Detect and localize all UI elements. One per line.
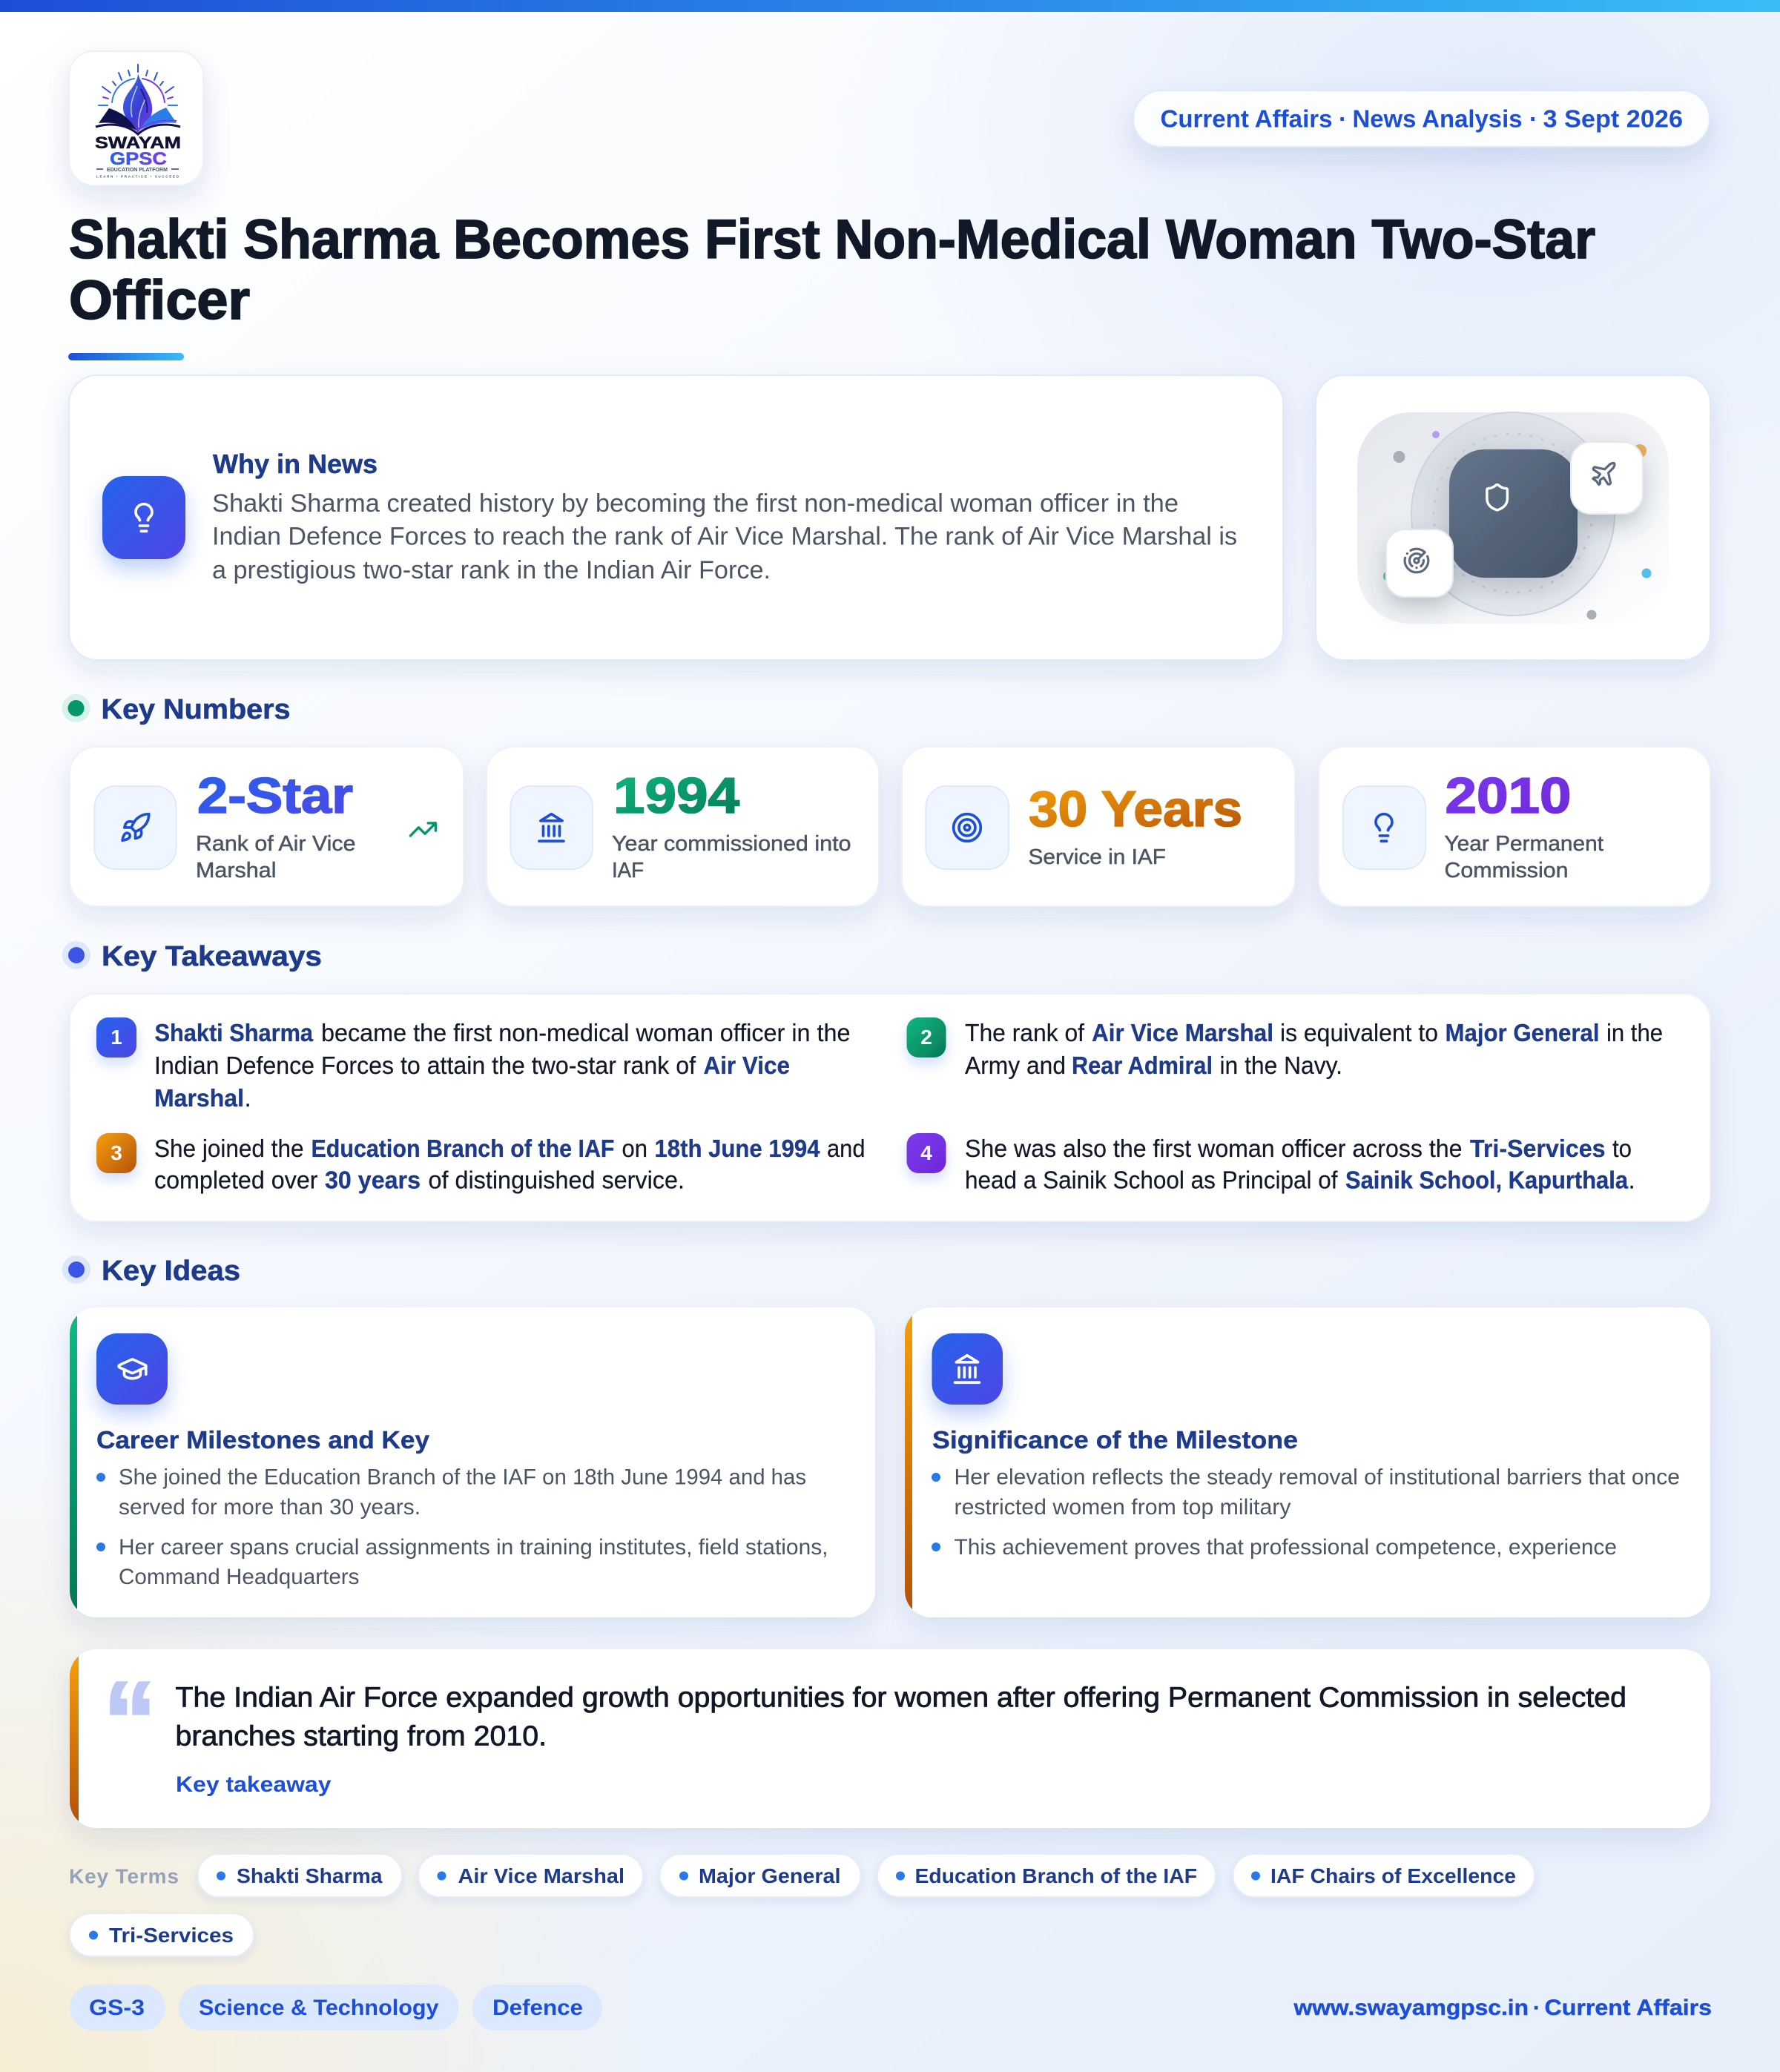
- bullet list: served for more than 30 years.: [119, 1495, 421, 1520]
- title: [69, 208, 1595, 331]
- stat card: 2010: [1319, 747, 1710, 906]
- tag: Defence: Defence: [492, 1996, 583, 2020]
- logo: Swayam GPSC: GPSC: [110, 149, 167, 169]
- logo: Swayam GPSC: [69, 51, 203, 185]
- bullet list: She joined the Education Branch of the IAF on 18th June 1994 and has: [119, 1465, 806, 1489]
- takeaway 3: 3: [111, 1141, 122, 1164]
- takeaway 4: [906, 1133, 1635, 1194]
- takeaway 1: Air Vice: [703, 1052, 790, 1079]
- logo: Swayam GPSC: SWAYAM: [95, 133, 181, 152]
- text: why in news body: Indian Defence Forces to reach the rank of Air Vice Marshal. The rank of Air Vice Marshal is: [212, 522, 1237, 550]
- takeaway 4: Tri-Services: [1470, 1135, 1605, 1162]
- heading: key ideas: Key Ideas: [102, 1256, 240, 1287]
- takeaway 3: on: [622, 1135, 647, 1162]
- stat card: 30 Years: [902, 747, 1295, 906]
- stat card: 1994: Year commissioned into: [612, 832, 851, 856]
- heading: key takeaways: Key Takeaways: [102, 941, 322, 972]
- icon: shield tile: [1449, 449, 1578, 578]
- text: why in news body: [212, 489, 1237, 584]
- term: Air Vice Marshal: [418, 1854, 643, 1897]
- stat card: 1994: IAF: [612, 859, 644, 882]
- takeaway 4: .: [1629, 1166, 1635, 1194]
- key terms label: Key Terms: [69, 1864, 179, 1888]
- takeaway 2: 2: [920, 1026, 932, 1049]
- card title: Significance of the Milestone: [932, 1426, 1298, 1454]
- footer credit: ·: [1533, 1996, 1540, 2020]
- takeaway 2: Rear Admiral: [1072, 1052, 1213, 1079]
- takeaway 4: to: [1612, 1135, 1632, 1162]
- icon: radar tile: [1386, 529, 1453, 597]
- decorative dots: [1383, 431, 1651, 620]
- panel: illustration: [1316, 375, 1710, 660]
- takeaway 1: [96, 1017, 850, 1112]
- term: Shakti Sharma: Shakti Sharma: [237, 1864, 383, 1887]
- stat card: 1994: [487, 747, 879, 906]
- date pill: ·: [1339, 105, 1347, 132]
- stat card: 2010: Commission: [1445, 859, 1568, 882]
- stat card: 30 Years: Service in IAF: [1028, 845, 1166, 869]
- takeaway 3: [96, 1133, 865, 1194]
- stat card: 1994: 1994: [613, 768, 739, 824]
- text: why in news body: Shakti Sharma created history by becoming the first non-medical woman officer in the: [212, 489, 1179, 518]
- icon: plane tile: [1571, 442, 1643, 514]
- panel: key takeaways: [70, 994, 1710, 1221]
- term: Shakti Sharma: [197, 1854, 402, 1897]
- heading: why in news: Why in News: [213, 449, 378, 479]
- quote text: The Indian Air Force expanded growth opportunities for women after offering Permanent Commission in selected: [175, 1682, 1626, 1713]
- term: Major General: [660, 1854, 860, 1897]
- panel: significance of the milestone: [905, 1307, 1710, 1617]
- bullet list: This achievement proves that professional competence, experience: [954, 1535, 1617, 1560]
- takeaway 2: Major General: [1445, 1019, 1599, 1046]
- term: Air Vice Marshal: Air Vice Marshal: [458, 1864, 624, 1887]
- logo: Swayam GPSC: EDUCATION PLATFORM: [107, 166, 168, 173]
- takeaway 2: in the: [1606, 1019, 1663, 1046]
- takeaway 4: 4: [920, 1141, 932, 1164]
- footer credit: Current Affairs: [1544, 1996, 1712, 2020]
- footer credit: [1293, 1996, 1712, 2020]
- title accent bar: [68, 353, 184, 360]
- bullet list: Her career spans crucial assignments in training institutes, field stations,: [119, 1535, 828, 1560]
- tag: GS-3: GS-3: [89, 1996, 145, 2020]
- takeaway 2: [906, 1017, 1663, 1079]
- date pill: Current Affairs: [1160, 105, 1332, 132]
- takeaway 2: in the Navy.: [1219, 1052, 1342, 1079]
- date pill: [1133, 90, 1710, 147]
- takeaway 1: Shakti Sharma: [154, 1019, 314, 1046]
- takeaway 1: Marshal: [154, 1084, 244, 1112]
- date pill: News Analysis: [1353, 105, 1522, 132]
- stat card: 30 Years: 30 Years: [1029, 781, 1242, 837]
- takeaway 2: Army and: [965, 1052, 1066, 1079]
- takeaway 3: 30 years: [325, 1166, 421, 1194]
- icon: trend up: [410, 823, 435, 836]
- takeaway 3: Education Branch of the IAF: [312, 1135, 614, 1162]
- term: Education Branch of the IAF: [877, 1854, 1216, 1897]
- tag: Science & Technology: Science & Technology: [199, 1996, 439, 2020]
- term: Tri-Services: [70, 1913, 254, 1956]
- takeaway 3: She joined the: [154, 1135, 304, 1162]
- takeaway 4: She was also the first woman officer across the: [965, 1135, 1463, 1162]
- takeaway 3: and: [827, 1135, 865, 1162]
- takeaway 3: 18th June 1994: [654, 1135, 820, 1162]
- logo: Swayam GPSC: LEARN • PRACTICE • SUCCEED: [96, 175, 179, 178]
- quote text: [175, 1682, 1626, 1752]
- icon: lightbulb: [102, 476, 185, 559]
- term: Major General: Major General: [699, 1864, 841, 1887]
- bullet list: Command Headquarters: [119, 1565, 359, 1589]
- title: Shakti Sharma Becomes First Non-Medical Woman Two-Star: [69, 208, 1595, 270]
- term: IAF Chairs of Excellence: IAF Chairs of Excellence: [1270, 1864, 1516, 1887]
- takeaway 2: Air Vice Marshal: [1092, 1019, 1273, 1046]
- quote caption: Key takeaway: [176, 1772, 332, 1797]
- takeaway 3: completed over: [154, 1166, 318, 1194]
- panel: quote callout: [70, 1649, 1710, 1828]
- icon: graduation cap: [96, 1333, 168, 1405]
- takeaway 2: The rank of: [965, 1019, 1085, 1046]
- stat card: 2-Star: [70, 747, 464, 906]
- bullet list: Her elevation reflects the steady removal of institutional barriers that once: [954, 1465, 1680, 1489]
- tag: Science & Technology: [179, 1984, 458, 2030]
- takeaway 4: head a Sainik School as Principal of: [965, 1166, 1338, 1194]
- text: why in news body: a prestigious two-star rank in the Indian Air Force.: [212, 556, 771, 584]
- bullet list: [932, 1465, 1680, 1560]
- date pill: ·: [1529, 105, 1537, 132]
- heading: key numbers: Key Numbers: [101, 694, 291, 725]
- takeaway 1: .: [245, 1084, 251, 1112]
- tag: GS-3: [70, 1984, 165, 2030]
- title: Officer: [69, 269, 250, 331]
- stat card: 2010: 2010: [1445, 768, 1571, 824]
- takeaway 1: became the first non-medical woman officer in the: [321, 1019, 850, 1046]
- stat card: 2-Star: Marshal: [196, 859, 276, 882]
- panel: career milestones: [70, 1307, 875, 1617]
- stat card: 2-Star: Rank of Air Vice: [196, 832, 356, 856]
- term: IAF Chairs of Excellence: [1233, 1854, 1535, 1897]
- term: Tri-Services: Tri-Services: [109, 1924, 234, 1947]
- takeaway 2: is equivalent to: [1280, 1019, 1438, 1046]
- footer credit: www.swayamgpsc.in: [1293, 1996, 1529, 2020]
- term: Education Branch of the IAF: Education Branch of the IAF: [915, 1864, 1197, 1887]
- panel: why in news: [69, 375, 1283, 660]
- takeaway 1: 1: [111, 1026, 122, 1049]
- bullet list: [96, 1465, 828, 1589]
- quote text: branches starting from 2010.: [175, 1720, 547, 1752]
- takeaway 4: Sainik School, Kapurthala: [1345, 1166, 1629, 1194]
- bullet list: restricted women from top military: [954, 1495, 1290, 1520]
- tag: Defence: [472, 1984, 602, 2030]
- date pill: 3 Sept 2026: [1543, 105, 1683, 132]
- stat card: 2010: Year Permanent: [1445, 832, 1603, 856]
- takeaway 1: Indian Defence Forces to attain the two-star rank of: [154, 1052, 696, 1079]
- stat card: 2-Star: 2-Star: [197, 768, 353, 824]
- card title: Career Milestones and Key: [96, 1426, 430, 1454]
- top gradient bar: [0, 0, 1780, 12]
- icon: landmark: [932, 1333, 1003, 1405]
- icon: quote mark: “: [103, 1658, 156, 1783]
- takeaway 3: of distinguished service.: [429, 1166, 685, 1194]
